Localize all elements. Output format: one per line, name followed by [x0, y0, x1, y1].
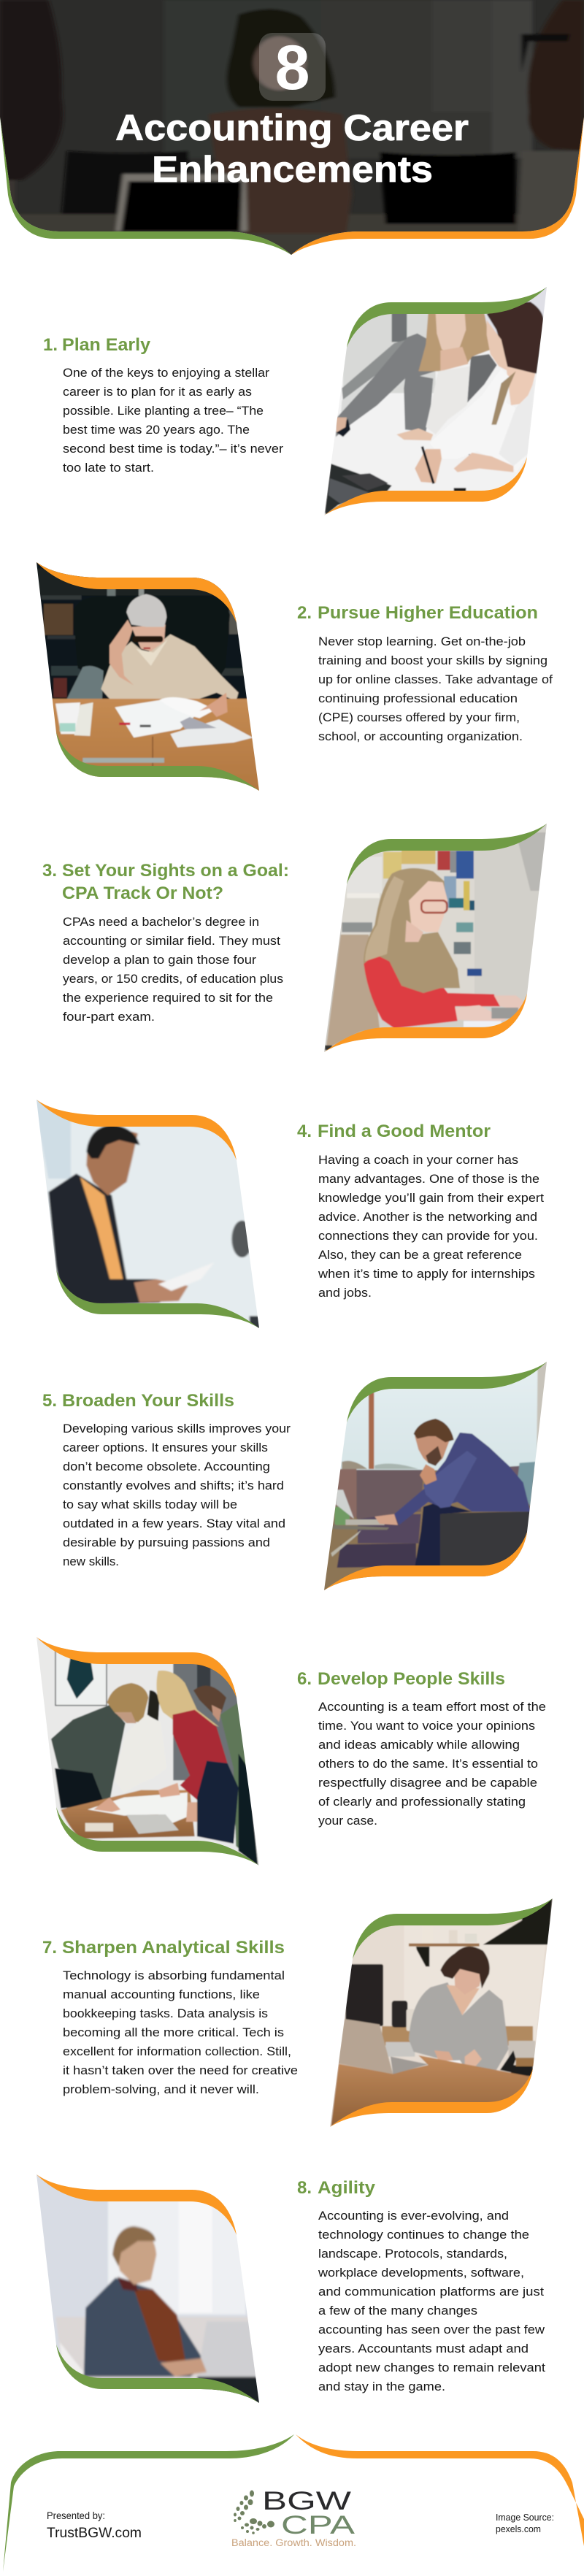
panel: 5 broaden your skills	[42, 1356, 555, 1597]
text block 6: of clearly and professionally stating	[318, 1795, 526, 1809]
header photo	[0, 0, 584, 258]
text block 8	[318, 2209, 545, 2393]
text block 6: respectfully disagree and be capable	[318, 1776, 537, 1790]
footer	[3, 2434, 584, 2572]
text block 4: and jobs.	[318, 1287, 372, 1300]
text block 4: many advantages. One of those is the	[318, 1173, 539, 1186]
text block 1: possible. Like planting a tree– “The	[63, 405, 264, 418]
image source	[496, 2512, 554, 2534]
band: orange	[36, 2174, 237, 2235]
number badge: 8	[275, 33, 310, 103]
text block 3: four-part exam.	[63, 1011, 155, 1024]
heading 2: Pursue Higher Education	[318, 603, 538, 623]
photo 4: man at whiteboard	[34, 1095, 264, 1336]
header green accent	[0, 117, 291, 255]
heading 8	[297, 2178, 376, 2198]
photo 3: woman in red at laptop	[321, 818, 555, 1059]
text block 6: and ideas amicably while allowing	[318, 1739, 520, 1752]
band: green	[56, 2345, 259, 2403]
photo 5: man on couch with laptop	[321, 1356, 555, 1597]
logo: CPA	[281, 2511, 356, 2539]
text block 6: others to do the same. It’s essential to	[318, 1757, 538, 1771]
text block 7: bookkeeping tasks. Data analysis is	[63, 2007, 268, 2020]
text block 7	[63, 1969, 298, 2096]
text block 8: adopt new changes to remain relevant	[318, 2361, 545, 2374]
text block 2: up for online classes. Take advantage of	[318, 673, 553, 686]
text block 8: years. Accountants must adapt and	[318, 2342, 529, 2355]
text block 4: knowledge you’ll gain from their expert	[318, 1192, 544, 1205]
heading 3: 3.	[42, 861, 57, 881]
panel: 8 agility	[34, 2167, 545, 2411]
text block 7: it hasn’t taken over the need for creative	[63, 2064, 298, 2077]
heading 2: 2.	[297, 603, 312, 623]
band: green	[347, 824, 547, 884]
panel: 6 develop people skills	[34, 1634, 546, 1871]
text block 4: Having a coach in your corner has	[318, 1154, 518, 1167]
text block 3: years, or 150 credits, of education plus	[63, 973, 283, 986]
text block 3: develop a plan to gain those four	[63, 954, 257, 967]
heading 3: CPA Track Or Not?	[62, 883, 223, 903]
panel: 3 set your sights	[42, 818, 555, 1059]
text block 4: connections they can provide for you.	[318, 1230, 538, 1243]
band: orange	[324, 1532, 527, 1590]
band: green	[353, 1898, 553, 1959]
text block 1: second best time is today.”– it’s never	[63, 442, 284, 456]
logo: Balance. Growth. Wisdom.	[231, 2537, 356, 2548]
text block 1	[63, 367, 284, 475]
presented by: TrustBGW.com	[47, 2526, 142, 2541]
text block 7: becoming all the more critical. Tech is	[63, 2026, 284, 2039]
logo: BGW	[262, 2487, 351, 2515]
icon: logo dots	[234, 2490, 274, 2534]
heading 6: Develop People Skills	[318, 1669, 505, 1689]
title: Enhancements	[152, 149, 433, 190]
heading 1: 1.	[43, 335, 58, 355]
photo 1: two women reviewing papers	[321, 281, 555, 522]
text block 6: Accounting is a team effort most of the	[318, 1701, 546, 1714]
title	[115, 107, 469, 190]
text block 8: landscape. Protocols, standards,	[318, 2247, 507, 2261]
band: orange	[324, 994, 527, 1052]
text block 3	[63, 916, 283, 1024]
heading 4: Find a Good Mentor	[318, 1122, 491, 1141]
text block 3: CPAs need a bachelor’s degree in	[63, 916, 259, 929]
text block 2: school, or accounting organization.	[318, 730, 523, 743]
band: green	[347, 287, 547, 348]
photo 6: team around a table	[34, 1634, 265, 1871]
text block 4: when it’s time to apply for internships	[318, 1268, 535, 1281]
heading 3: Set Your Sights on a Goal:	[62, 861, 289, 881]
text block 8: accounting has seen over the past few	[318, 2323, 545, 2337]
text block 8: Accounting is ever-evolving, and	[318, 2209, 509, 2223]
text block 8: and stay in the game.	[318, 2380, 445, 2393]
text block 7: Technology is absorbing fundamental	[63, 1969, 285, 1982]
header banner	[0, 0, 584, 258]
text block 1: too late to start.	[63, 461, 154, 475]
photo 7: woman writing at kitchen counter	[326, 1896, 557, 2130]
heading 7: 7.	[42, 1938, 57, 1958]
panel: 7 sharpen analytical skills	[42, 1896, 557, 2130]
text block 8: technology continues to change the	[318, 2228, 529, 2242]
text block 8: a few of the many changes	[318, 2304, 477, 2318]
text block 2: training and boost your skills by signing	[318, 654, 548, 667]
band: orange	[36, 562, 237, 623]
text block 2: continuing professional education	[318, 692, 518, 705]
text block 5: don’t become obsolete. Accounting	[63, 1460, 270, 1473]
text block 4	[318, 1154, 544, 1300]
footer green accent	[3, 2434, 294, 2572]
text block 6: your case.	[318, 1814, 377, 1828]
text block 2: (CPE) courses offered by your firm,	[318, 711, 520, 724]
logo	[231, 2487, 356, 2548]
text block 3: the experience required to sit for the	[63, 992, 273, 1005]
photo 8: man on sofa with laptop	[34, 2167, 264, 2411]
panel: 1 plan early	[43, 281, 555, 522]
band: orange	[36, 1100, 237, 1160]
heading 6: 6.	[297, 1669, 312, 1689]
number badge	[259, 33, 326, 103]
heading 5: Broaden Your Skills	[62, 1391, 234, 1411]
text block 2	[318, 635, 553, 743]
text block 4: Also, they can be a great reference	[318, 1249, 522, 1262]
text block 6	[318, 1701, 546, 1828]
heading 8: 8.	[297, 2178, 312, 2198]
band: green	[56, 1270, 259, 1328]
band: orange	[324, 457, 527, 515]
panel: 4 find a good mentor	[34, 1095, 544, 1336]
text block 5: career options. It ensures your skills	[63, 1441, 268, 1454]
text block 5	[63, 1422, 291, 1568]
image source: Image Source:	[496, 2512, 554, 2523]
presented by: Presented by:	[47, 2510, 105, 2521]
photo 2: woman reading documents	[29, 556, 263, 797]
text block 5: new skills.	[63, 1555, 119, 1568]
heading 8: Agility	[318, 2178, 376, 2198]
text block 8: and communication platforms are just	[318, 2285, 544, 2299]
band: orange	[36, 1637, 237, 1698]
text block 1: career is to plan for it as early as	[63, 386, 252, 399]
image source: pexels.com	[496, 2523, 541, 2534]
text block 5: constantly evolves and shifts; it’s hard	[63, 1479, 284, 1492]
text block 3: accounting or similar field. They must	[63, 935, 280, 948]
text block 6: time. You want to voice your opinions	[318, 1720, 535, 1733]
heading 4: 4.	[297, 1122, 312, 1141]
title: Accounting Career	[115, 107, 469, 148]
heading 5: 5.	[42, 1391, 57, 1411]
band: green	[347, 1362, 547, 1422]
heading 7: Sharpen Analytical Skills	[62, 1938, 285, 1958]
text block 1: best time was 20 years ago. The	[63, 423, 250, 437]
text block 5: desirable by pursuing passions and	[63, 1536, 270, 1549]
band: green	[56, 1807, 259, 1866]
band: orange	[330, 2069, 533, 2127]
band: green	[56, 732, 259, 791]
text block 7: problem-solving, and it never will.	[63, 2083, 259, 2096]
text block 4: advice. Another is the networking and	[318, 1211, 537, 1224]
text block 1: One of the keys to enjoying a stellar	[63, 367, 270, 380]
text block 8: workplace developments, software,	[318, 2266, 524, 2280]
header orange accent	[291, 117, 584, 255]
panel: 2 pursue higher education	[29, 556, 553, 797]
heading 1: Plan Early	[62, 335, 151, 355]
text block 7: manual accounting functions, like	[63, 1988, 260, 2001]
text block 5: Developing various skills improves your	[63, 1422, 291, 1435]
text block 2: Never stop learning. Get on-the-job	[318, 635, 526, 648]
footer orange accent	[296, 2434, 584, 2546]
text block 5: outdated in a few years. Stay vital and	[63, 1517, 285, 1530]
heading 3	[42, 861, 289, 903]
text block 5: to say what skills today will be	[63, 1498, 237, 1511]
presented by	[47, 2510, 142, 2541]
text block 7: excellent for information collection. Still,	[63, 2045, 291, 2058]
